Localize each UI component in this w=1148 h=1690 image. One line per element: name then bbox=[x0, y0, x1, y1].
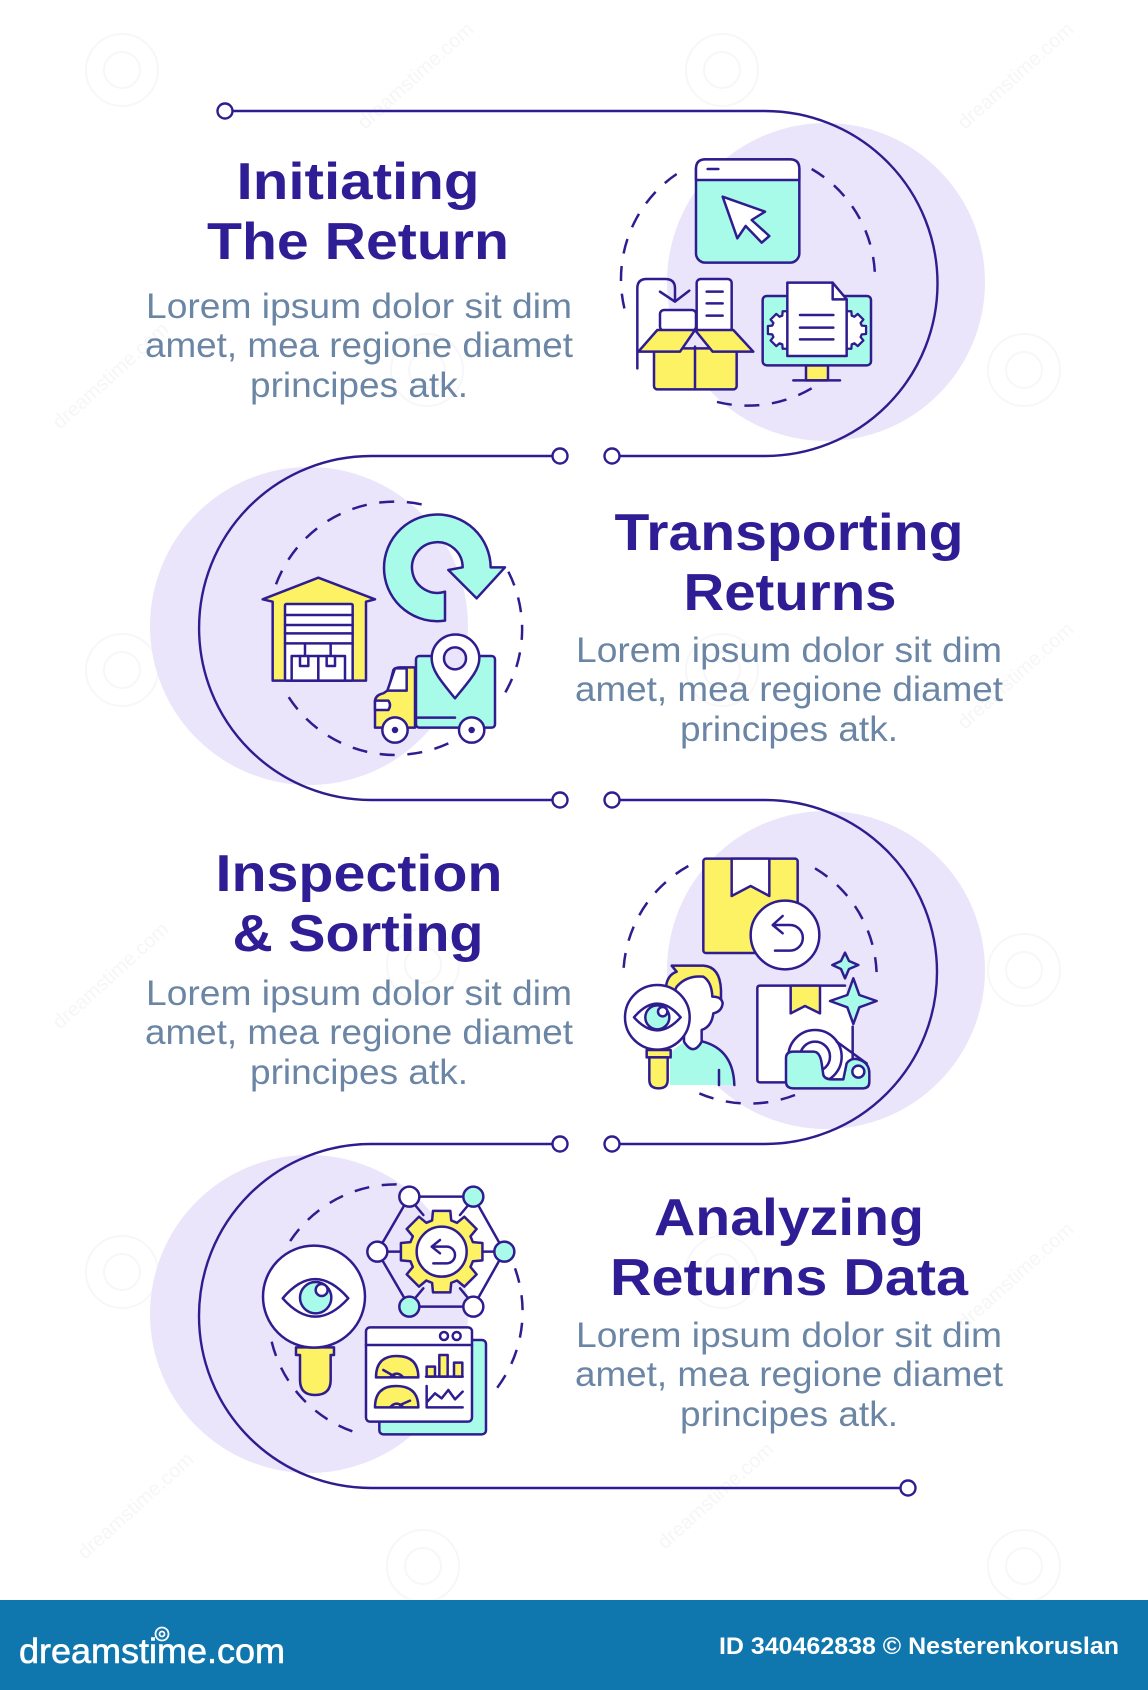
icon: parcel, inspector and tape bbox=[623, 859, 877, 1104]
background circle 2 bbox=[150, 467, 468, 785]
infographic canvas: dreamstime.com bbox=[74, 1448, 198, 1564]
connector line 3 bbox=[604, 792, 937, 1152]
footer credit text: ID 340462838 © Nesterenkoruslan bbox=[719, 1633, 1119, 1660]
infographic canvas: dreamstime.com bbox=[954, 18, 1078, 134]
footer logo text: dreamstime.com bbox=[19, 1632, 285, 1671]
body text 1 bbox=[145, 287, 573, 405]
heading: inspection and sorting bbox=[216, 845, 502, 963]
panel: analyzing returns data bbox=[150, 1136, 1003, 1496]
heading: transporting returns: Returns bbox=[684, 564, 896, 622]
body text 1: Lorem ipsum dolor sit dim bbox=[146, 287, 572, 326]
body text 1: amet, mea regione diamet bbox=[145, 326, 573, 365]
infographic canvas: dreamstime.com bbox=[954, 1218, 1078, 1334]
heading: transporting returns: Transporting bbox=[614, 504, 964, 562]
infographic canvas: dreamstime.com bbox=[654, 1438, 778, 1554]
connector line 2 bbox=[199, 448, 568, 808]
body text 4: Lorem ipsum dolor sit dim bbox=[576, 1316, 1002, 1355]
infographic canvas: dreamstime.com bbox=[954, 618, 1078, 734]
heading: initiating the return: Initiating bbox=[236, 153, 480, 211]
panel: transporting returns bbox=[150, 448, 1003, 808]
icon: magnifier, gear network and dashboard bbox=[263, 1184, 523, 1434]
background circle 1 bbox=[667, 123, 985, 441]
heading: analyzing returns data: Analyzing bbox=[654, 1189, 924, 1247]
body text 1: principes atk. bbox=[250, 366, 468, 405]
icon: footer swirl bbox=[156, 1628, 168, 1640]
infographic canvas: dreamstime.com bbox=[49, 318, 173, 434]
body text 3: Lorem ipsum dolor sit dim bbox=[146, 974, 572, 1013]
heading: analyzing returns data: Returns Data bbox=[610, 1249, 969, 1307]
body text 4: amet, mea regione diamet bbox=[575, 1355, 1003, 1394]
body text 4: principes atk. bbox=[680, 1395, 898, 1434]
body text 3 bbox=[145, 974, 573, 1092]
icon: warehouse, return arrow and truck bbox=[263, 502, 522, 755]
body text 2: amet, mea regione diamet bbox=[575, 670, 1003, 709]
heading: initiating the return bbox=[207, 153, 509, 271]
heading: analyzing returns data bbox=[610, 1189, 969, 1307]
body text 2: Lorem ipsum dolor sit dim bbox=[576, 631, 1002, 670]
connector line 1 bbox=[218, 104, 938, 464]
body text 3: amet, mea regione diamet bbox=[145, 1013, 573, 1052]
panel: initiating the return bbox=[145, 104, 985, 464]
body text 2 bbox=[575, 631, 1003, 749]
connector line 4 bbox=[199, 1136, 916, 1496]
heading: transporting returns bbox=[614, 504, 964, 622]
heading: initiating the return: The Return bbox=[207, 213, 509, 271]
infographic canvas: dreamstime.com bbox=[354, 18, 478, 134]
icon: browser, box and document bbox=[621, 159, 875, 406]
panel: inspection and sorting bbox=[145, 792, 985, 1152]
background circle 3 bbox=[667, 811, 985, 1129]
body text 2: principes atk. bbox=[680, 710, 898, 749]
infographic canvas: dreamstime.com bbox=[49, 918, 173, 1034]
footer bar bbox=[0, 1600, 1148, 1690]
heading: inspection and sorting: & Sorting bbox=[232, 905, 484, 963]
heading: inspection and sorting: Inspection bbox=[216, 845, 502, 903]
body text 4 bbox=[575, 1316, 1003, 1434]
background circle 4 bbox=[150, 1155, 468, 1473]
body text 3: principes atk. bbox=[250, 1053, 468, 1092]
